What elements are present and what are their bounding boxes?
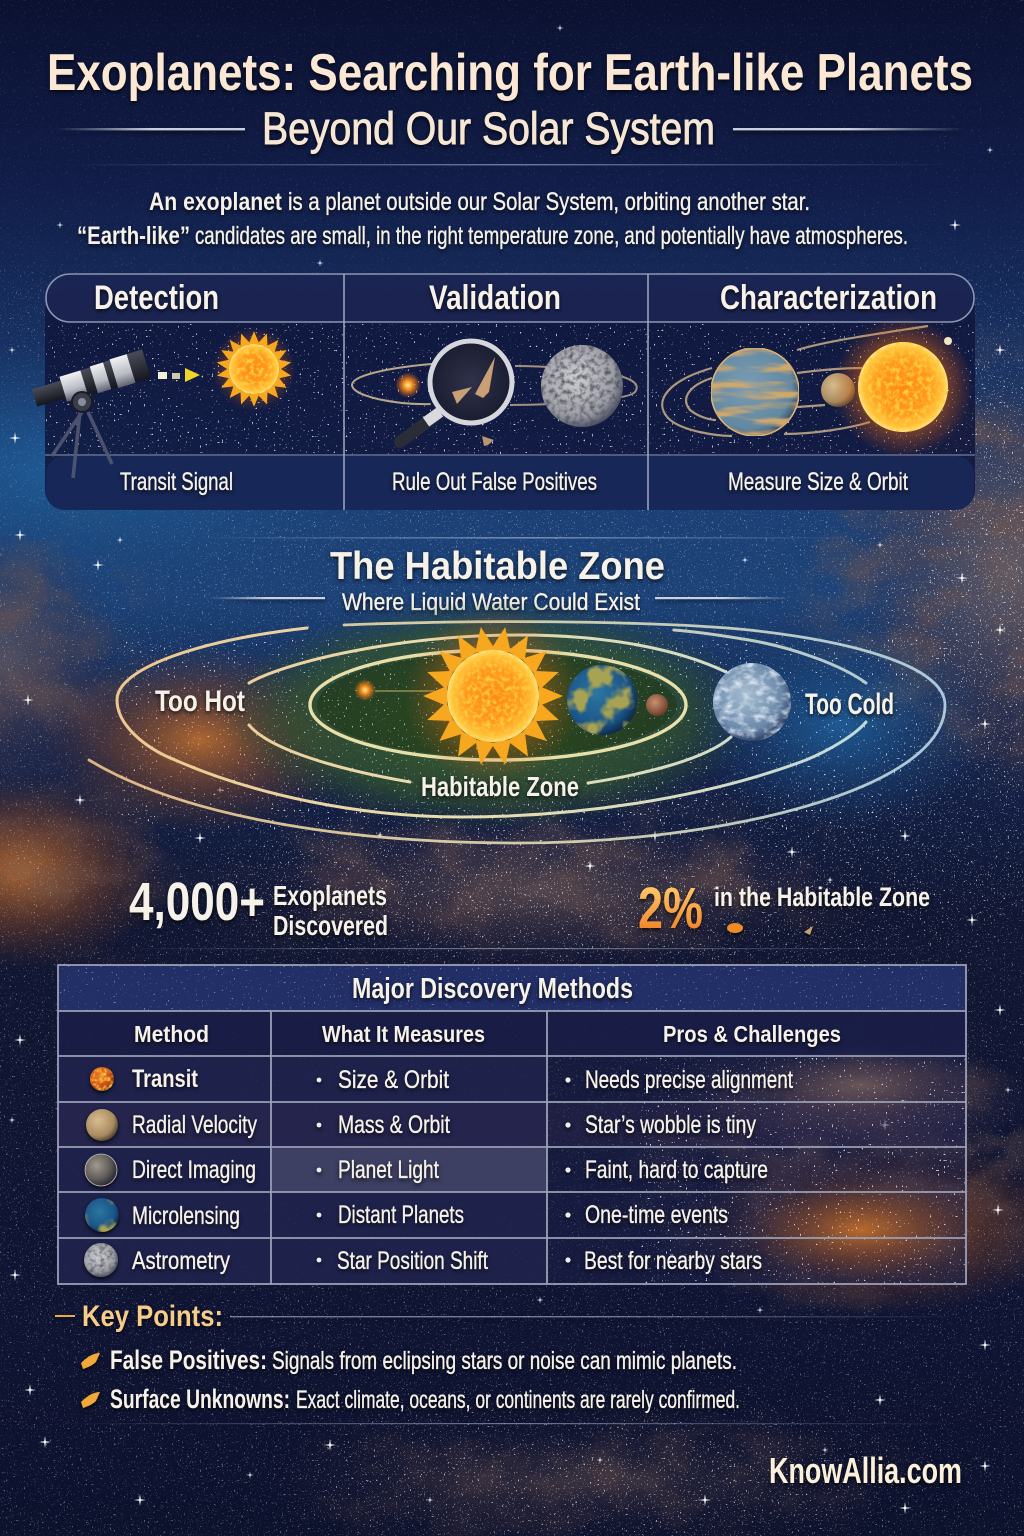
- key point: surface unknowns: Exact climate, oceans, or continents are rarely confirmed.: [296, 1386, 740, 1414]
- icon: magnifying glass with checkmark: [400, 341, 512, 446]
- icon: characterization orbits: [662, 326, 928, 436]
- stat: 4,000+ exoplanets: [129, 872, 388, 941]
- label: Habitable Zone: Habitable Zone: [421, 771, 579, 802]
- heading: The Habitable Zone: Where Liquid Water Could Exist: [342, 589, 640, 616]
- table column headers: What It Measures: [322, 1021, 485, 1047]
- key point: false positives: Signals from eclipsing stars or noise can mimic planets.: [272, 1347, 737, 1375]
- table title: Major Discovery Methods: [352, 973, 633, 1005]
- row: Astrometry: Astrometry: [132, 1247, 230, 1275]
- label: Rule Out False Positives: Rule Out False Positives: [392, 468, 597, 496]
- brand: KnowAllia.com: KnowAllia.com: [769, 1450, 962, 1491]
- label: Too Hot: Too Hot: [155, 685, 245, 718]
- panel heading: Characterization: Characterization: [720, 279, 937, 317]
- key point: false positives: False Positives:: [110, 1345, 267, 1375]
- label: Measure Size and Orbit: Measure Size & Orbit: [728, 468, 908, 496]
- table column headers: [134, 1021, 841, 1047]
- heading: The Habitable Zone: The Habitable Zone: [330, 545, 665, 588]
- row: Astrometry: Star Position Shift: [337, 1247, 488, 1275]
- key point: surface unknowns: [81, 1384, 740, 1414]
- icon: small moon: [821, 373, 855, 407]
- table column headers: Method: [134, 1021, 209, 1047]
- icon: earth-like planet: [567, 665, 637, 735]
- panel heading: Detection: Detection: [94, 279, 219, 317]
- row: Direct Imaging: [85, 1154, 768, 1186]
- icon: transit signal arrow: [158, 368, 200, 382]
- stat: 4,000+ exoplanets: Discovered: [273, 910, 388, 941]
- row: Direct Imaging: Faint, hard to capture: [585, 1156, 768, 1184]
- icon: sun detection: [212, 327, 296, 411]
- heading: The Habitable Zone: [210, 545, 790, 616]
- row: Microlensing: Distant Planets: [338, 1201, 464, 1229]
- row: Microlensing: Microlensing: [132, 1202, 240, 1230]
- icon: orbit with star: [352, 364, 637, 405]
- table column headers: Pros & Challenges: [663, 1021, 841, 1047]
- row: Direct Imaging: Direct Imaging: [132, 1156, 256, 1184]
- row: Radial Velocity: Radial Velocity: [132, 1111, 257, 1139]
- stat: 4,000+ exoplanets: Exoplanets: [273, 880, 387, 911]
- row: Radial Velocity: Mass & Orbit: [338, 1111, 450, 1139]
- table row fills: [58, 965, 975, 1284]
- row: Microlensing: One-time events: [585, 1201, 728, 1229]
- key point: surface unknowns: Surface Unknowns:: [110, 1384, 290, 1414]
- orbit rings: [89, 622, 945, 843]
- table: major discovery methods: [58, 965, 975, 1284]
- row: Astrometry: [84, 1243, 762, 1277]
- row: Transit: Needs precise alignment: [585, 1066, 793, 1094]
- icon: banded gas planet: [711, 348, 799, 436]
- stat: 4,000+ exoplanets: 4,000+: [129, 872, 265, 932]
- subtitle with rules: Beyond Our Solar System: [262, 103, 715, 154]
- temperature zone colour wash: [40, 600, 990, 835]
- panel: process steps: [30, 274, 975, 510]
- row: Astrometry: Best for nearby stars: [584, 1247, 762, 1275]
- row: Microlensing: [85, 1198, 728, 1232]
- row: Transit: Transit: [132, 1065, 199, 1093]
- row: Radial Velocity: [86, 1109, 756, 1141]
- row: Transit: Size & Orbit: [338, 1066, 449, 1094]
- key point: false positives: [81, 1345, 737, 1375]
- label: Transit Signal: Transit Signal: [120, 468, 233, 496]
- icon: small planet: [646, 694, 668, 716]
- label: Too Cold: Too Cold: [805, 688, 894, 721]
- table grid: [58, 965, 966, 1284]
- row: Transit: [90, 1065, 793, 1094]
- diagram: habitable zone orbits: [40, 600, 990, 843]
- icon: telescope: [30, 349, 151, 478]
- panel heading: Validation: Validation: [429, 279, 561, 317]
- icon: central sun: [405, 608, 581, 784]
- intro text: [77, 188, 908, 250]
- icon: star characterization: [833, 317, 973, 457]
- small glowing star: [354, 679, 435, 701]
- intro text: “Earth-like”: [77, 222, 190, 250]
- stat: 2 percent in the habitable zone: [638, 876, 930, 941]
- stat: 2 percent in the habitable zone: in the Habitable Zone: [714, 882, 930, 912]
- row: Direct Imaging: Planet Light: [338, 1156, 439, 1184]
- stat: 2 percent in the habitable zone: 2%: [638, 876, 703, 941]
- icon: icy planet: [713, 663, 791, 741]
- heading: Key Points: Key Points:: [82, 1300, 223, 1333]
- intro text: An exoplanet: [149, 188, 283, 216]
- intro text: is a planet outside our Solar System, orbiting another star.: [288, 188, 810, 216]
- icon: rocky planet: [541, 345, 623, 427]
- row: Radial Velocity: Star’s wobble is tiny: [585, 1111, 756, 1139]
